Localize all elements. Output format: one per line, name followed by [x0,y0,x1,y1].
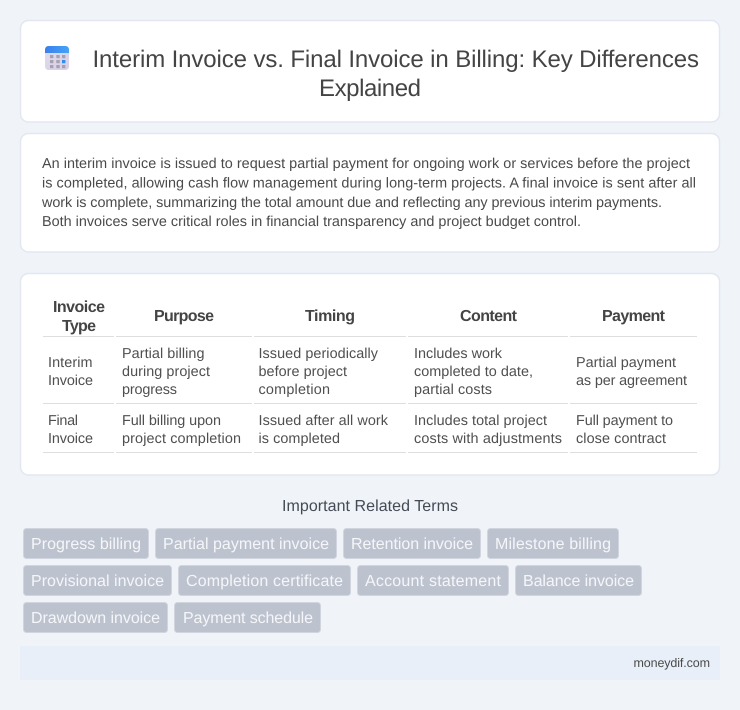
table header row: Content [460,308,518,325]
tag: drawdown invoice: Drawdown invoice [31,610,160,627]
tag: completion certificate: Completion certificate [186,573,343,590]
table row: final invoice: Final [48,413,78,429]
panel: header [20,20,720,122]
tag: balance invoice [516,566,642,596]
table row: interim invoice: Partial payment [576,355,676,371]
table row: final invoice: Issued after all work [258,413,389,429]
title: Interim Invoice vs. Final Invoice in Billing: Key Differences [92,46,699,73]
table row: final invoice: is completed [258,431,340,447]
table row: interim invoice: Partial billing [122,346,204,362]
table row: interim invoice: Issued periodically [258,346,379,362]
table row: final invoice: Includes total project [414,413,547,429]
table row: final invoice: Full billing upon [122,413,221,429]
table header row: Purpose [154,308,214,325]
table row: interim invoice [43,346,697,404]
panel: introduction text: An interim invoice is issued to request partial payment for ongoing work or services before the project [42,156,690,172]
table row: final invoice: Full payment to [576,413,673,429]
tag: balance invoice: Balance invoice [523,573,634,590]
table header row: Invoice [53,299,105,316]
panel: introduction text: Both invoices serve critical roles in financial transparency and project budget control. [42,214,581,230]
table row: interim invoice: as per agreement [576,373,687,389]
tag: provisional invoice [24,566,172,596]
table header row: Type [62,318,96,335]
tag: partial payment invoice [156,528,336,558]
panel: comparison table [20,274,720,475]
tag: account statement [358,566,508,596]
table row: interim invoice: partial costs [414,382,492,398]
icon: calendar [45,46,69,70]
panel: introduction text: work is complete, summarizing the total amount due and reflecting any previous interim payments. [41,195,662,211]
related term tags [24,528,642,632]
table row: interim invoice: completion [258,382,330,398]
tag: payment schedule: Payment schedule [183,610,313,627]
table row: final invoice: Invoice [48,431,93,447]
panel: introduction text [20,134,720,252]
tag: retention invoice: Retention invoice [351,536,473,553]
tag: completion certificate [178,566,350,596]
tag: progress billing [24,528,148,558]
tag: milestone billing [488,528,618,558]
table row: final invoice: costs with adjustments [414,431,562,447]
tag: payment schedule [174,602,320,632]
table row: interim invoice: Interim [48,355,92,371]
panel: introduction text: is completed, allowing cash flow management during long-term projects. A final invoice is sent after all [42,175,696,191]
table row: final invoice [43,413,697,452]
tag: retention invoice [344,528,480,558]
table row: interim invoice: completed to date, [414,364,533,380]
table header row: Timing [305,308,355,325]
table row: interim invoice: during project [122,364,210,380]
tag: account statement: Account statement [365,573,502,590]
tag: provisional invoice: Provisional invoice [31,573,164,590]
tag: partial payment invoice: Partial payment invoice [163,536,329,553]
heading: important related terms: Important Related Terms [282,498,458,515]
table row: interim invoice: progress [122,382,177,398]
footer bar: moneydif.com [634,656,710,670]
title [92,46,699,102]
table row: interim invoice: Invoice [48,373,93,389]
table row: final invoice: close contract [576,431,666,447]
tag: milestone billing: Milestone billing [495,536,611,553]
title: Explained [319,75,421,102]
tag: progress billing: Progress billing [31,536,141,553]
footer bar [20,646,720,680]
table header row: Payment [602,308,666,325]
table row: interim invoice: before project [258,364,347,380]
tag: drawdown invoice [24,602,168,632]
table header row [43,299,697,336]
table row: final invoice: project completion [122,431,241,447]
table row: interim invoice: Includes work [414,346,503,362]
